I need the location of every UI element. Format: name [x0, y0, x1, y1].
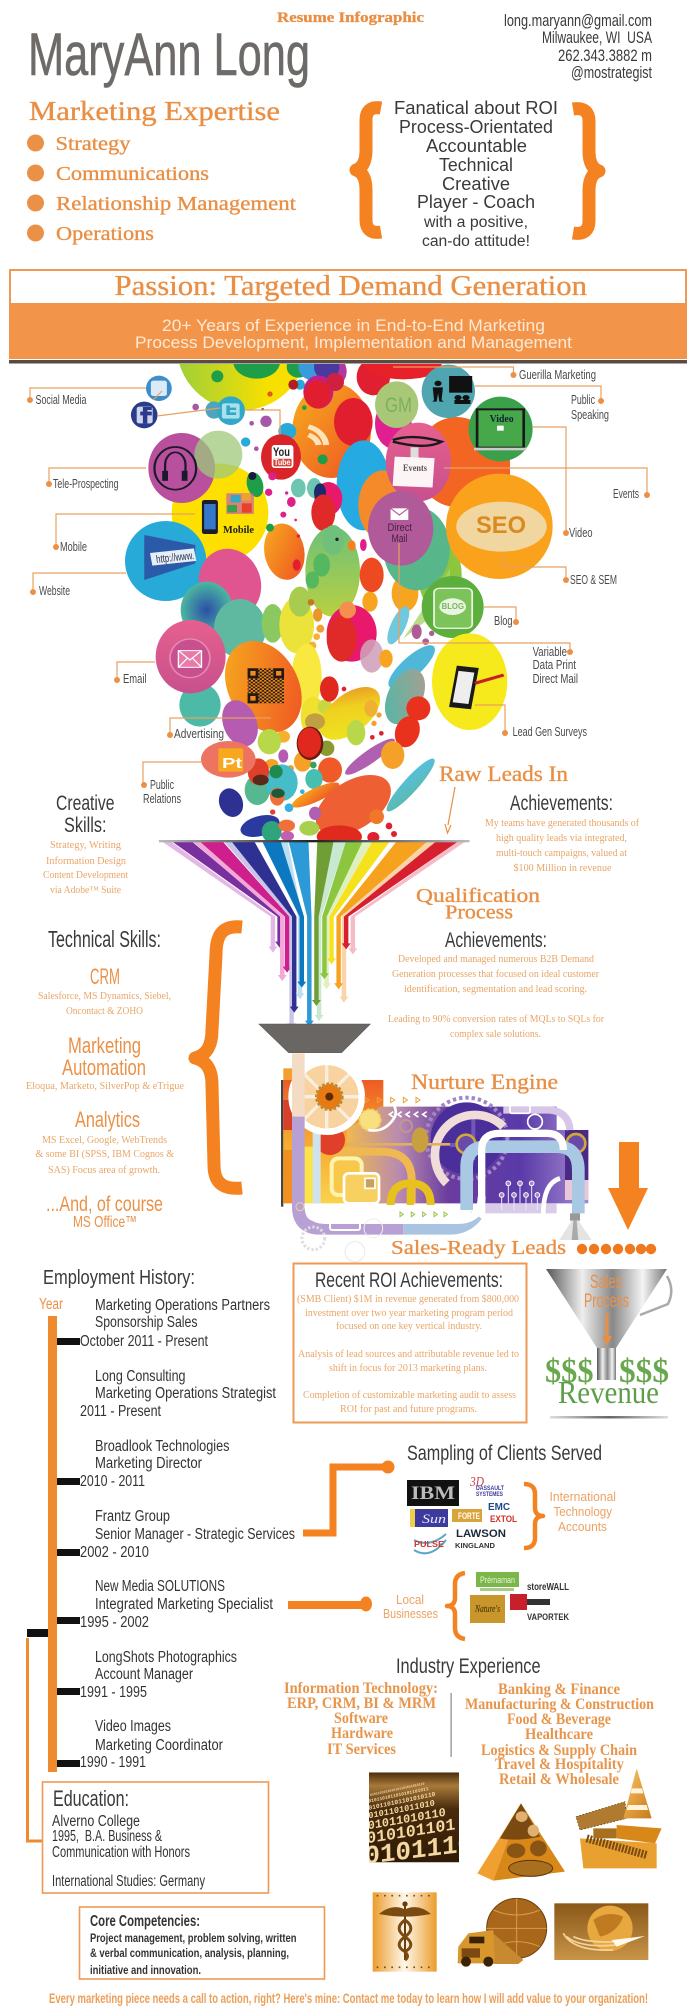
callout: guerilla marketing: Guerilla Marketing: [519, 367, 596, 382]
creative skills list: [43, 840, 128, 896]
callout: mobile: Mobile: [60, 539, 87, 554]
job: frantz group: Senior Manager - Strategic Services: [95, 1526, 295, 1543]
bullet list: Relationship Management: [56, 193, 296, 215]
bubble icon labels: Video: [490, 414, 514, 425]
arrow: sales process: [602, 1313, 612, 1346]
list: technology industries: IT Services: [327, 1741, 396, 1758]
icon: survey tablet: [449, 666, 504, 709]
funnel label: [584, 1272, 629, 1312]
callout: variable data print direct mail: Data Print: [533, 657, 576, 672]
roi text: shift in focus for 2013 marketing plans.: [329, 1363, 487, 1374]
job: long consulting: [80, 1368, 277, 1420]
list: other industries: Banking & Finance: [498, 1681, 620, 1698]
logo: extol: EXTOL: [490, 1514, 517, 1524]
job: long consulting: 2011 - Present: [80, 1403, 162, 1420]
label: local businesses: Businesses: [383, 1607, 438, 1621]
icon: qr code: [248, 668, 284, 703]
achievements text: high quality leads via integrated,: [496, 833, 627, 844]
timeline: [27, 1296, 80, 1841]
roi text: ROI for past and future programs.: [340, 1404, 477, 1415]
logo: pulse: [414, 1534, 446, 1553]
panel: marketing expertise: [27, 96, 296, 245]
job: broadlook technologies: Marketing Director: [95, 1455, 202, 1472]
logo: natures: [470, 1595, 505, 1623]
nurture engine illustration: [281, 1053, 592, 1262]
attribute list: Process-Orientated: [399, 117, 553, 137]
panel: personal attributes in braces: [356, 98, 599, 250]
banner: passion and experience: [9, 270, 687, 364]
job: long consulting: Long Consulting: [95, 1368, 186, 1385]
bubble icons: [131, 376, 547, 772]
logo: sun: [410, 1509, 448, 1527]
contact details: long.maryann@gmail.com: [504, 11, 652, 30]
revenue label: Revenue: [558, 1374, 659, 1410]
icon: twitter: [205, 396, 245, 425]
callout: video: [533, 427, 592, 540]
heading: qualification process: [416, 885, 540, 924]
job: marketing operations partners: Sponsorship Sales: [95, 1314, 198, 1331]
qualification text: Developed and managed numerous B2B Demand: [398, 954, 594, 965]
logo: ibm: IBM: [411, 1483, 455, 1504]
arrow: large orange down arrow: [608, 1142, 648, 1230]
qualification text: identification, segmentation and lead scoring.: [404, 984, 587, 995]
education details: International Studies: Germany: [52, 1873, 205, 1890]
list: other industries: [465, 1681, 654, 1788]
heading: sampling of clients: Sampling of Clients Served: [407, 1442, 602, 1465]
icon: local brace: [447, 1573, 465, 1639]
heading: nurture engine: Nurture Engine: [411, 1069, 558, 1094]
skill: marketing automation: Automation: [62, 1055, 146, 1080]
roi text: (SMB Client) $1M in revenue generated from $800,000: [297, 1294, 519, 1305]
education details: 1995, B.A. Business &: [52, 1828, 162, 1845]
creative skills list: Information Design: [46, 856, 126, 867]
bullet list: Operations: [56, 223, 154, 245]
logo: dassault systemes: 3D: [469, 1475, 484, 1490]
list: other industries: Food & Beverage: [507, 1711, 611, 1728]
skill: marketing automation: [26, 1033, 185, 1092]
funnel label: Process: [584, 1291, 629, 1312]
list: technology industries: [284, 1680, 438, 1758]
connector: new media to local businesses: [288, 1596, 372, 1612]
icon: direct mail envelope: [391, 508, 408, 520]
bubble icon labels: Mobile: [223, 524, 254, 536]
qualification text: Generation processes that focused on ideal customer: [392, 969, 600, 980]
job: frantz group: 2002 - 2010: [80, 1544, 149, 1561]
job: longshots photographics: 1991 - 1995: [80, 1684, 147, 1701]
roi text: [297, 1294, 519, 1415]
logo: vaportek: VAPORTEK: [527, 1612, 569, 1622]
label: international technology accounts: Accounts: [558, 1520, 607, 1534]
heading: creative skills: Creative: [56, 792, 114, 815]
icon: seo word cloud: [456, 502, 547, 552]
skill: analytics: MS Excel, Google, WebTrends: [42, 1135, 167, 1146]
roi text: Completion of customizable marketing audit to assess: [303, 1390, 516, 1401]
industry images: [364, 1768, 662, 1972]
image: binary code: 010110101101010110: [368, 1791, 436, 1812]
list: technology industries: ERP, CRM, BI & MRM: [287, 1695, 436, 1712]
logo: dassault systemes: [469, 1475, 504, 1498]
callout: blog: [484, 607, 519, 628]
icon: headphones: [154, 447, 196, 490]
bubble icon labels: You: [273, 445, 290, 459]
heading: qualification process: Qualification: [416, 885, 540, 907]
list: technology industries: Hardware: [331, 1725, 393, 1742]
qualification text: Leading to 90% conversion rates of MQLs to SQLs for: [388, 1014, 605, 1025]
achievements text: $100 Million in revenue: [514, 863, 612, 874]
image: binary code: 0101101011010: [368, 1798, 435, 1821]
list: other industries: Manufacturing & Construction: [465, 1696, 654, 1713]
skill: marketing automation: Marketing: [68, 1033, 141, 1058]
attribute list: Player - Coach: [417, 192, 535, 212]
callout: email: Email: [123, 671, 147, 686]
job: frantz group: Frantz Group: [95, 1508, 170, 1525]
callout: public speaking: Speaking: [571, 407, 609, 422]
skill: analytics: & some BI (SPSS, IBM Cognos &: [36, 1149, 174, 1160]
panel: raw leads achievements: [439, 761, 640, 874]
skill: analytics: Analytics: [75, 1107, 140, 1132]
panel: local businesses: [383, 1572, 569, 1639]
callout: lead gen surveys: Lead Gen Surveys: [513, 724, 587, 739]
skill: crm: CRM: [90, 964, 120, 989]
logo: ibm: [407, 1480, 459, 1506]
bubble icon labels: Tube: [274, 458, 291, 467]
job: frantz group: [80, 1508, 295, 1561]
panel: qualification process: [388, 885, 605, 1040]
logo: kingland: KINGLAND: [455, 1543, 495, 1550]
skill: ms office: MS Office™: [73, 1214, 137, 1231]
job: longshots photographics: [80, 1649, 237, 1701]
heading: recent roi achievements: Recent ROI Achievements:: [315, 1268, 503, 1292]
list: technology industries: Software: [334, 1710, 388, 1727]
callout: tele-prospecting: Tele-Prospecting: [53, 476, 118, 491]
list: other industries: Logistics & Supply Chain: [481, 1742, 637, 1759]
logo: dassault systemes: SYSTEMES: [476, 1492, 503, 1498]
attribute list: Accountable: [426, 136, 527, 156]
roi text: investment over two year marketing program period: [305, 1308, 513, 1319]
logo: storewall: storeWALL: [527, 1582, 569, 1593]
panel: sampling of clients: [407, 1442, 616, 1553]
qualification text: [388, 954, 605, 1040]
heading: sales-ready leads: Sales-Ready Leads: [391, 1237, 566, 1259]
competencies text: Project management, problem solving, written: [90, 1931, 296, 1945]
experience statement: 20+ Years of Experience in End-to-End Marketing: [162, 316, 545, 335]
education details: Communication with Honors: [52, 1844, 190, 1861]
attribute list: can-do attitude!: [422, 233, 530, 250]
contact details: @mostrategist: [571, 63, 652, 82]
logo: dassault systemes: DASSAULT: [476, 1486, 504, 1492]
image: binary code: 0101101011010101101011010110: [370, 1782, 425, 1798]
job: new media solutions: 1995 - 2002: [80, 1614, 149, 1631]
callout: seo and sem: [503, 553, 617, 587]
bubble icon labels: Events: [403, 463, 427, 473]
creative skills list: Strategy, Writing: [50, 840, 121, 851]
skill: ms office: ...And, of course: [46, 1193, 163, 1216]
image: truck and globe: [458, 1898, 547, 1967]
funnel label: Sales: [590, 1272, 622, 1293]
contact details: Milwaukee, WI USA: [542, 28, 652, 47]
heading: passion: Passion: Targeted Demand Generation: [114, 271, 587, 302]
callout: events: [444, 468, 650, 501]
logo: premaman: [476, 1572, 519, 1591]
callout: website: [30, 573, 126, 598]
callout: advertising: Advertising: [174, 726, 224, 741]
skill: marketing automation: Eloqua, Marketo, SilverPop & eTrigue: [26, 1081, 185, 1092]
heading: raw leads in: Raw Leads In: [439, 761, 568, 786]
row of orange dots: [577, 1244, 656, 1254]
achievements text: [485, 818, 640, 874]
skill: analytics: SAS) Focus area of growth.: [48, 1165, 160, 1176]
bubble icon labels: http://www.: [156, 550, 195, 566]
bullet list: Communications: [56, 163, 209, 185]
callout: tele-prospecting: [46, 468, 146, 491]
callout: public relations: [141, 762, 202, 806]
callout: advertising: [167, 718, 271, 741]
contact details: 262.343.3882 m: [558, 46, 652, 65]
bubble icon labels: [156, 394, 526, 772]
callout: variable data print direct mail: Direct Mail: [533, 671, 578, 686]
education details: Alverno College: [52, 1813, 140, 1830]
callout: video: Video: [569, 525, 592, 540]
image: binary code: 0101101011010101101011: [368, 1786, 429, 1805]
competencies text: initiative and innovation.: [90, 1963, 201, 1977]
dollar signs: [545, 1353, 669, 1390]
logo: natures: Nature's: [474, 1604, 500, 1615]
icon: linkedin: [146, 376, 172, 401]
panel: sales process funnel to revenue: [545, 1269, 671, 1418]
callout: guerilla marketing: [393, 367, 596, 382]
icon: email envelope: [170, 639, 210, 678]
image: pyramid: [477, 1803, 565, 1881]
callout: seo and sem: SEO & SEM: [570, 572, 617, 587]
competencies text: & verbal communication, analysis, planning,: [90, 1946, 289, 1960]
job: video images: 1990 - 1991: [80, 1754, 146, 1771]
callout: public relations: Public: [150, 777, 174, 792]
job: video images: Marketing Coordinator: [95, 1737, 223, 1754]
skill: crm: Oncontact & ZOHO: [66, 1006, 143, 1017]
achievements text: My teams have generated thousands of: [485, 818, 640, 829]
job: video images: Video Images: [95, 1718, 171, 1735]
heading: achievements: Achievements:: [510, 792, 613, 815]
bubble icon labels: SEO: [476, 512, 526, 539]
education details: [52, 1813, 205, 1890]
image: caduceus: [373, 1892, 437, 1972]
icon: left brace: [356, 108, 381, 232]
callout: events: Events: [613, 486, 639, 501]
label: local businesses: Local: [396, 1593, 424, 1607]
image: construction cone and bolts: [576, 1768, 662, 1868]
panel: creative skills: [43, 792, 128, 896]
heading: qualification process: Process: [445, 902, 513, 924]
bubble icon labels: Pt: [222, 755, 242, 772]
job: marketing operations partners: October 2011 - Present: [80, 1333, 209, 1350]
image: binary code: 010101101: [366, 1816, 456, 1849]
roi text: focused on one key vertical industry.: [336, 1321, 482, 1332]
icon: mobile phone and apps: [202, 493, 254, 534]
skill: crm: [38, 964, 171, 1017]
bubble icon labels: Direct: [388, 522, 412, 534]
image: binary code: 01011010110: [367, 1806, 446, 1833]
callout: mobile: [53, 514, 195, 554]
heading: marketing expertise: Marketing Expertise: [29, 96, 280, 126]
panel: recent roi achievements: [294, 1264, 526, 1422]
panel: technical skills: [26, 926, 242, 1231]
panel: employment history: [27, 1267, 295, 1841]
icon: silver funnel: [546, 1269, 671, 1380]
icon: facebook: [131, 402, 158, 428]
qualification text: complex sale solutions.: [450, 1029, 541, 1040]
heading: industry experience: Industry Experience: [396, 1655, 541, 1678]
job: marketing operations partners: [80, 1297, 270, 1350]
heading: core competencies: Core Competencies:: [90, 1913, 200, 1930]
label: international technology accounts: Technology: [554, 1505, 613, 1519]
job: broadlook technologies: [80, 1438, 230, 1490]
achievements text: multi-touch campaigns, valued at: [496, 848, 627, 859]
callout: variable data print direct mail: [399, 543, 578, 686]
list: other industries: Healthcare: [525, 1726, 593, 1743]
attribute list: Creative: [442, 174, 510, 194]
job: video images: [80, 1718, 223, 1771]
contact details: [504, 11, 652, 82]
icon: large brace: [195, 927, 242, 1188]
label: international technology accounts: [550, 1490, 616, 1534]
image: binary code: 0101110: [364, 1829, 473, 1872]
connector: frantz group to clients: [303, 1460, 394, 1533]
image: binary code: [369, 1772, 459, 1862]
panel: core competencies: [80, 1907, 324, 1979]
skill: analytics: [36, 1107, 174, 1176]
list: other industries: Travel & Hospitality: [495, 1756, 624, 1773]
icon: gray hopper above engine: [259, 1024, 371, 1053]
icon: blog speech bubble: [434, 588, 472, 628]
bullet list: [27, 133, 296, 245]
callout: variable data print direct mail: Variable: [533, 644, 567, 659]
callout: email: [114, 662, 155, 686]
heading: employment history: Employment History:: [43, 1267, 195, 1289]
creative skills list: via Adobe™ Suite: [50, 885, 122, 896]
callout: website: Website: [39, 583, 70, 598]
callout: social media: Social Media: [36, 392, 87, 407]
icon: website url bar: [144, 535, 196, 580]
dollar signs: $$$: [545, 1353, 594, 1390]
experience statement: [135, 316, 572, 352]
job: broadlook technologies: Broadlook Technologies: [95, 1438, 230, 1455]
job: new media solutions: New Media SOLUTIONS: [95, 1578, 225, 1595]
creative skills list: Content Development: [43, 870, 128, 881]
heading: education: Education:: [53, 1786, 129, 1811]
icon: video laptop: [474, 409, 526, 450]
heading: achievements: Achievements:: [445, 929, 547, 952]
icon: event badge and lanyard: [393, 437, 442, 487]
timeline: Year: [39, 1296, 63, 1313]
icon: public relations badge: [218, 748, 243, 772]
experience statement: Process Development, Implementation and Management: [135, 333, 572, 352]
chart: lower bubbles pouring into funnel: [156, 620, 441, 848]
attribute list: with a positive,: [423, 214, 528, 231]
arrow: raw leads into funnel: [445, 787, 455, 833]
roi text: Analysis of lead sources and attributable revenue led to: [298, 1349, 519, 1360]
callout: public speaking: Public: [571, 392, 595, 407]
logo: sun: Sun: [422, 1511, 446, 1526]
callout: public speaking: [475, 386, 609, 422]
logo: forte: [452, 1509, 482, 1522]
rainbow funnel with arrows: [159, 840, 470, 1029]
list: technology industries: Information Technology:: [284, 1680, 438, 1697]
bubble icon labels: Mail: [392, 533, 408, 545]
icon: public speaker: [432, 376, 472, 404]
logo: emc: EMC: [488, 1502, 510, 1513]
job: long consulting: Marketing Operations Strategist: [95, 1385, 277, 1402]
icon: clients brace: [524, 1484, 543, 1548]
heading: technical skills: Technical Skills:: [48, 926, 161, 952]
image: globe and plane: [554, 1903, 648, 1960]
skill: crm: Salesforce, MS Dynamics, Siebel,: [38, 991, 171, 1002]
competencies text: [90, 1931, 296, 1977]
attribute list: Technical: [439, 155, 513, 175]
callout: social media: [27, 388, 280, 434]
panel: education: [42, 1782, 268, 1893]
heading: creative skills: Skills:: [64, 814, 106, 837]
channel callouts with leader lines: [27, 367, 650, 806]
job: broadlook technologies: 2010 - 2011: [80, 1473, 145, 1490]
chart: marketing channel bubble cloud: [125, 280, 553, 730]
callout: public relations: Relations: [143, 791, 181, 806]
logo: forte: FORTE: [458, 1511, 480, 1521]
subtitle: Resume Infographic: Resume Infographic: [277, 10, 424, 26]
icon: rss: [308, 427, 326, 445]
job: new media solutions: Integrated Marketing Specialist: [95, 1596, 274, 1613]
logo: premaman: Prémaman: [480, 1575, 515, 1585]
list: other industries: Retail & Wholesale: [499, 1771, 619, 1788]
label: international technology accounts: International: [550, 1490, 616, 1504]
job: marketing operations partners: Marketing Operations Partners: [95, 1297, 270, 1314]
dollar signs: $$$: [619, 1353, 669, 1390]
skill: ms office: [46, 1193, 163, 1231]
attribute list: Fanatical about ROI: [394, 98, 558, 118]
bullet list: Strategy: [56, 133, 130, 155]
callout: lead gen surveys: [475, 705, 587, 739]
heading: creative skills: [56, 792, 114, 837]
icon: right brace: [573, 109, 599, 233]
attribute list: [394, 98, 558, 250]
panel: industry experience: [284, 1655, 654, 1788]
label: local businesses: [383, 1593, 438, 1621]
job: longshots photographics: Account Manager: [95, 1666, 193, 1683]
logo: pulse: PULSE: [414, 1540, 445, 1549]
bubble icon labels: BLOG: [442, 602, 464, 611]
job: longshots photographics: LongShots Photographics: [95, 1649, 237, 1666]
callout: blog: Blog: [494, 613, 513, 628]
logo: lawson: LAWSON: [456, 1528, 506, 1540]
bubble icon labels: GM: [385, 394, 412, 417]
logo: red company mark: [510, 1594, 550, 1610]
title: MaryAnn Long: MaryAnn Long: [28, 21, 310, 88]
job: new media solutions: [80, 1578, 274, 1631]
